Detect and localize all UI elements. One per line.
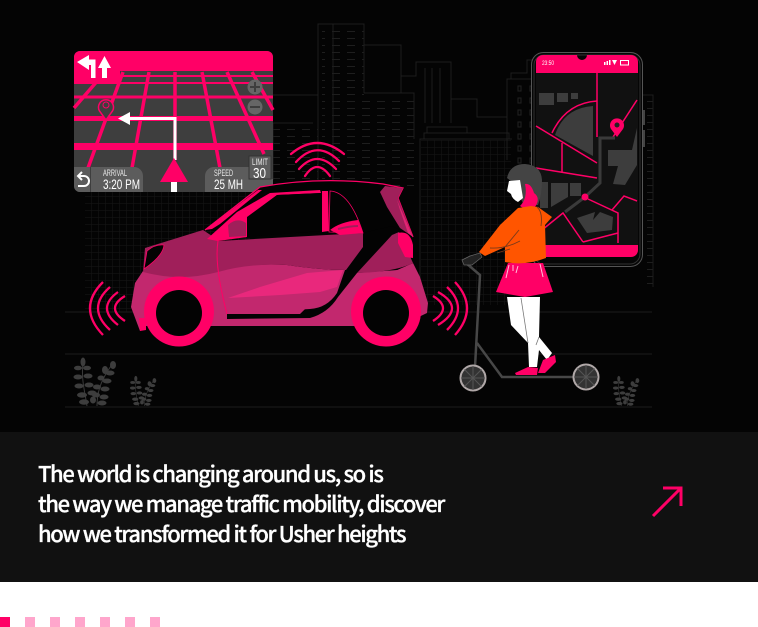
navigation header [74, 51, 273, 82]
phone screen [536, 73, 638, 245]
hand [462, 253, 482, 265]
car lower body [131, 263, 428, 331]
scooter rear wheel [574, 364, 598, 390]
scooter frame [466, 263, 586, 377]
speed limit sign: 30 [253, 165, 266, 182]
speed limit sign [249, 156, 271, 182]
sweater [479, 206, 552, 263]
icon: map pin [99, 100, 114, 120]
icon: arrow [652, 486, 682, 517]
girl on scooter [462, 164, 556, 375]
plant left large [74, 358, 116, 406]
skirt [496, 263, 553, 297]
phone status bar: 23:50 [542, 61, 555, 67]
door handle [330, 220, 363, 235]
phone side buttons [643, 110, 645, 147]
plant left small [130, 376, 156, 406]
panel: caption band [0, 432, 758, 582]
arrival time: ARRIVAL [103, 168, 127, 178]
plant right small [613, 376, 639, 406]
caption text: how we transformed it for Usher heights [38, 517, 405, 549]
skirt pleats [506, 264, 543, 278]
windshield strip [205, 190, 262, 230]
car [131, 181, 428, 346]
hair accent [520, 184, 538, 208]
arrival time: 3:20 PM [103, 176, 140, 192]
icon: straight arrow [98, 56, 111, 78]
car hood [143, 230, 218, 277]
panel: smartphone map [532, 52, 645, 266]
speed readout: SPEED [214, 168, 233, 178]
door highlight [228, 270, 343, 298]
face [507, 180, 523, 202]
hair [507, 164, 542, 205]
icon: car roof signal waves [291, 143, 344, 176]
icon: phone map pin [610, 118, 624, 137]
arrival time [91, 167, 143, 192]
car rear quarter [357, 232, 413, 273]
route arrow [118, 112, 175, 160]
window sill [207, 229, 247, 241]
route waypoint [582, 194, 588, 200]
icon: turn left arrow [77, 55, 96, 78]
scooter [460, 263, 598, 390]
caption text: the way we manage traffic mobility, discover [38, 487, 444, 519]
legs [507, 297, 552, 367]
speed limit sign: LIMIT [252, 157, 268, 167]
caption text: The world is changing around us, so is [38, 457, 383, 489]
illustration scene [0, 0, 758, 432]
door lower panel [218, 265, 345, 314]
side mirror [228, 220, 246, 237]
mud flap [139, 318, 146, 331]
icon: zoom out [248, 100, 262, 114]
shoes [515, 355, 556, 375]
phone bottom bar [536, 245, 638, 257]
door outline [217, 241, 227, 314]
car headlight [144, 245, 164, 269]
background city skyline [65, 24, 653, 407]
map road grid [74, 72, 273, 168]
map roads [536, 73, 637, 243]
panel: car navigation screen [74, 51, 273, 192]
speed readout [205, 167, 273, 192]
route line [565, 138, 615, 212]
window pillar [322, 191, 329, 232]
icon: rear sensor waves [433, 282, 467, 335]
leg seams [521, 298, 539, 345]
car spoiler [380, 186, 413, 237]
door upper panel [218, 233, 363, 272]
side window [247, 193, 321, 237]
scooter front wheel [460, 366, 486, 390]
vehicle position marker [160, 158, 188, 192]
car windshield frame [207, 190, 321, 239]
car tail light [398, 232, 413, 258]
back button [74, 167, 90, 192]
pagination dots [0, 617, 160, 627]
icon: zoom in [248, 80, 262, 94]
icon: front sensor waves [90, 282, 125, 335]
map blocks [539, 93, 637, 233]
car roof outline [205, 181, 413, 237]
caption text [38, 457, 446, 549]
rear window [329, 191, 363, 233]
car black side gap [227, 226, 413, 319]
phone status bar [536, 55, 638, 73]
rear wheel [351, 276, 421, 346]
front wheel [144, 276, 214, 346]
sweater folds [490, 207, 542, 253]
speed readout: 25 MH [214, 176, 243, 192]
